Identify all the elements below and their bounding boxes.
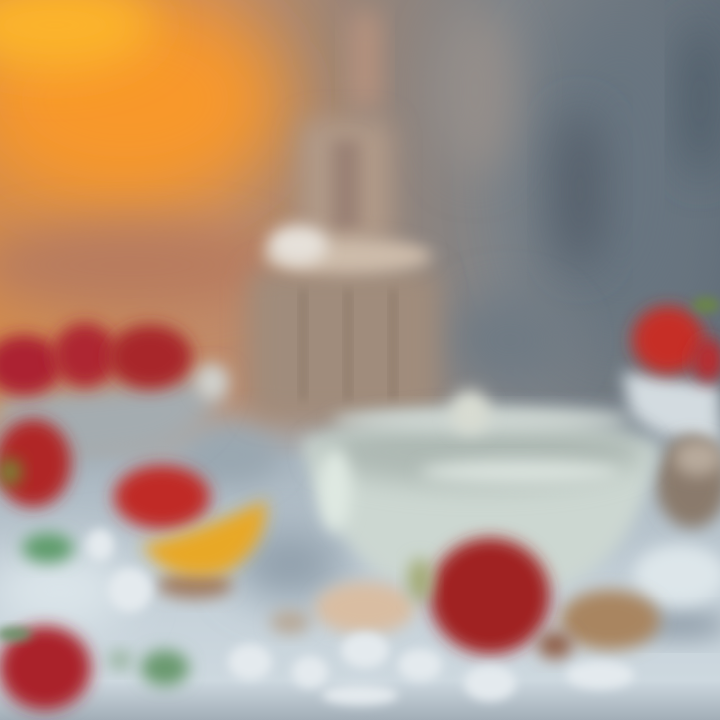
- central white bowl of cream: [302, 390, 658, 591]
- strawberry, bottom left: [0, 626, 91, 710]
- left bowl with strawberries: [0, 323, 228, 470]
- white crumbs along the bottom: [86, 529, 634, 705]
- background: warm orange to slate gradient: [0, 0, 720, 444]
- bread or nuts at right edge: [634, 436, 720, 605]
- nuts and crumbs at front of bowl: [270, 582, 660, 650]
- strawberry, lower left of bowl: [0, 419, 71, 507]
- large red strawberry in front of bowl: [408, 538, 573, 659]
- strawberry and mango slice: [114, 465, 266, 599]
- glass bottle with wicker base: [250, 10, 438, 418]
- table surface: [0, 390, 720, 720]
- right bowl with strawberry: [622, 297, 720, 445]
- green mint leaves: [22, 533, 189, 686]
